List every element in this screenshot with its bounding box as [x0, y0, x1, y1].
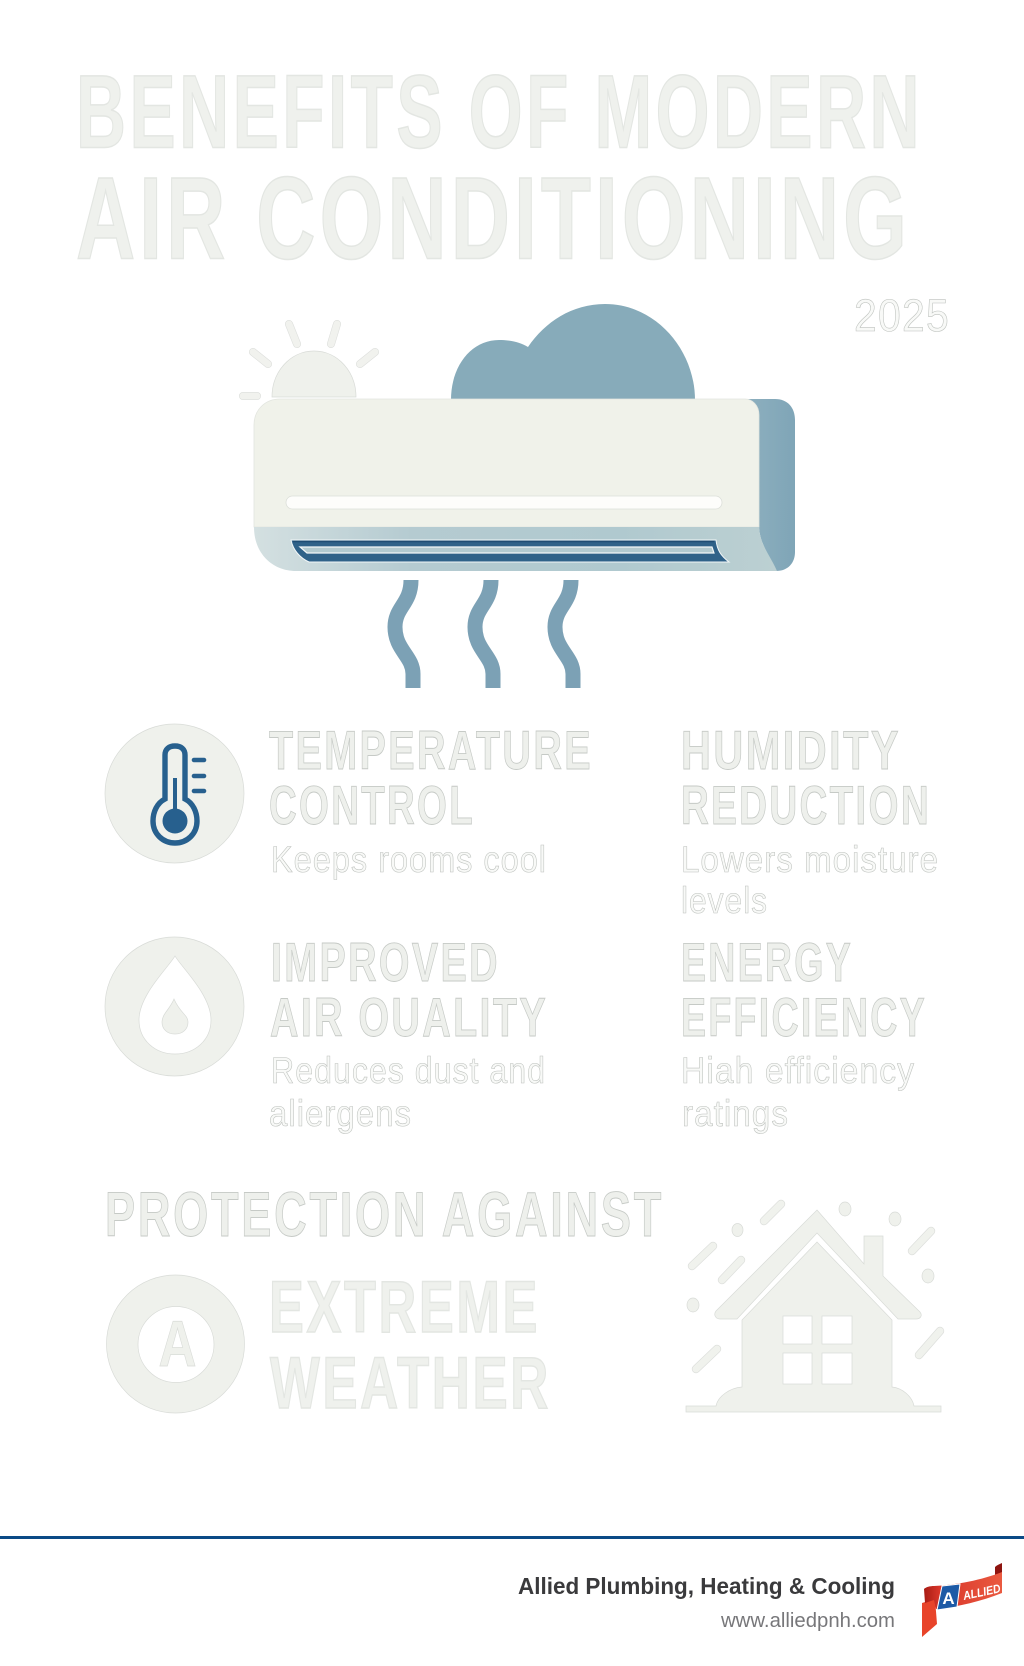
description — [269, 1050, 546, 1134]
panel: improved air quality — [105, 931, 548, 1134]
side panel — [745, 399, 795, 571]
heading — [681, 931, 927, 1048]
heading — [681, 719, 931, 836]
title — [76, 54, 923, 284]
air conditioner unit — [254, 399, 795, 571]
description: Lowers moisture — [681, 839, 939, 880]
icon: water drop — [105, 937, 244, 1076]
description: Reduces dust and — [271, 1050, 546, 1091]
heading: AIR OUALITY — [270, 986, 548, 1048]
footer — [0, 1536, 1024, 1637]
white light strip — [286, 496, 722, 509]
heading — [269, 719, 593, 836]
heading: TEMPERATURE — [269, 719, 593, 781]
icon: house in storm — [686, 1202, 941, 1412]
heading: HUMIDITY — [681, 719, 901, 781]
roof and chimney — [715, 1210, 921, 1319]
logo: ribbon — [922, 1563, 1002, 1637]
heading: EXTREME — [269, 1267, 540, 1348]
logo: ribbon: ALLIED — [961, 1581, 1002, 1603]
description — [681, 839, 939, 921]
heading: PROTECTION AGAINST — [105, 1180, 664, 1250]
company name: Allied Plumbing, Heating & Cooling — [518, 1573, 895, 1599]
heading: ENERGY — [681, 931, 853, 993]
description: Keeps rooms cool — [271, 839, 547, 880]
panel: protection against extreme weather — [105, 1180, 941, 1424]
house body — [686, 1242, 941, 1412]
heading — [269, 1267, 551, 1424]
description — [681, 1050, 915, 1134]
rain drops — [687, 1202, 934, 1312]
icon: thermometer — [105, 724, 244, 863]
heading — [270, 931, 548, 1048]
heading: WEATHER — [270, 1343, 551, 1424]
footer rule — [0, 1536, 1024, 1539]
description: Hiah efficiency — [681, 1050, 915, 1091]
logo: ribbon: A — [942, 1589, 955, 1608]
front panel — [254, 399, 759, 527]
lower housing — [254, 527, 777, 571]
website: www.alliedpnh.com — [720, 1610, 895, 1632]
description: aliergens — [269, 1093, 412, 1134]
airflow waves — [395, 580, 573, 688]
window — [783, 1316, 852, 1384]
year label: 2025 — [854, 290, 950, 341]
icon: cloud — [451, 304, 695, 400]
heading: CONTROL — [269, 774, 475, 836]
air vent — [291, 540, 729, 562]
icon: AC badge: A — [158, 1307, 196, 1380]
description: ratings — [682, 1093, 789, 1134]
icon: sun — [243, 324, 375, 397]
description: levels — [681, 880, 768, 921]
panel: energy efficiency — [681, 931, 927, 1134]
panel: humidity reduction — [681, 719, 939, 921]
rain streaks — [692, 1204, 940, 1369]
heading: IMPROVED — [271, 931, 500, 993]
panel: temperature control — [105, 719, 593, 880]
icon: AC badge — [106, 1275, 244, 1413]
